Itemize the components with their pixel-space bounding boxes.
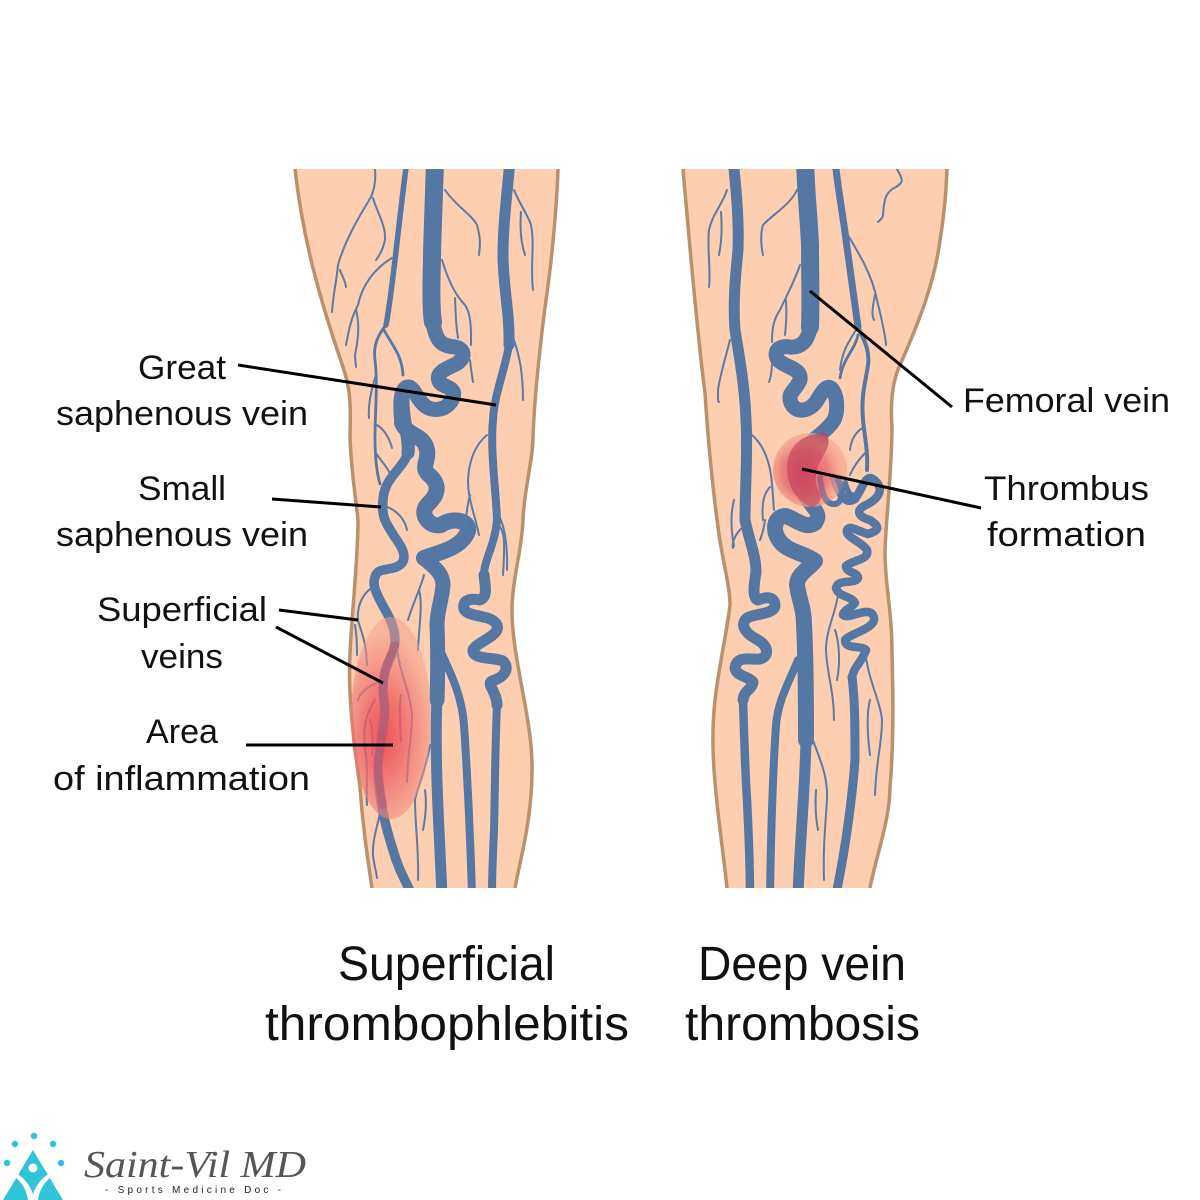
panel: superficial thrombophlebitis leg bbox=[295, 160, 558, 895]
label: thrombus formation: formation bbox=[987, 516, 1146, 554]
leg outline bbox=[295, 169, 558, 888]
icon: teal figure bbox=[3, 1133, 64, 1200]
label: small saphenous vein: saphenous vein bbox=[56, 516, 308, 554]
logo wordmark: Saint-Vil MD bbox=[84, 1144, 306, 1186]
label: great saphenous vein bbox=[56, 349, 496, 433]
title: superficial thrombophlebitis bbox=[265, 938, 629, 1051]
leg outline bbox=[683, 169, 947, 888]
leg skin bbox=[295, 169, 558, 888]
label: thrombus formation: Thrombus bbox=[984, 470, 1149, 508]
label: area of inflammation: Area bbox=[146, 713, 218, 751]
label: superficial veins: Superficial bbox=[97, 591, 267, 629]
label: great saphenous vein: Great bbox=[138, 349, 227, 387]
veins bbox=[332, 160, 533, 895]
thrombus formation bbox=[773, 433, 858, 508]
logo: Saint-Vil MD bbox=[3, 1133, 306, 1200]
label: area of inflammation: of inflammation bbox=[53, 760, 310, 798]
label: superficial veins bbox=[97, 591, 383, 683]
title: deep vein thrombosis bbox=[685, 938, 920, 1051]
panel: deep vein thrombosis leg bbox=[683, 160, 947, 895]
logo tagline: - Sports Medicine Doc - bbox=[105, 1185, 281, 1196]
title: deep vein thrombosis: Deep vein bbox=[698, 938, 906, 991]
area of inflammation bbox=[351, 617, 431, 819]
title: superficial thrombophlebitis: thrombophlebitis bbox=[265, 998, 629, 1051]
label: area of inflammation bbox=[53, 713, 393, 798]
label: superficial veins: veins bbox=[141, 638, 223, 676]
label: small saphenous vein bbox=[56, 470, 381, 554]
veins bbox=[708, 160, 902, 895]
label: thrombus formation bbox=[802, 469, 1149, 554]
label: femoral vein: Femoral vein bbox=[963, 382, 1170, 420]
leg skin bbox=[683, 169, 947, 888]
title: superficial thrombophlebitis: Superficial bbox=[338, 938, 555, 991]
label: great saphenous vein: saphenous vein bbox=[56, 395, 308, 433]
label: femoral vein bbox=[810, 291, 1170, 420]
label: small saphenous vein: Small bbox=[138, 470, 226, 508]
title: deep vein thrombosis: thrombosis bbox=[685, 998, 920, 1051]
